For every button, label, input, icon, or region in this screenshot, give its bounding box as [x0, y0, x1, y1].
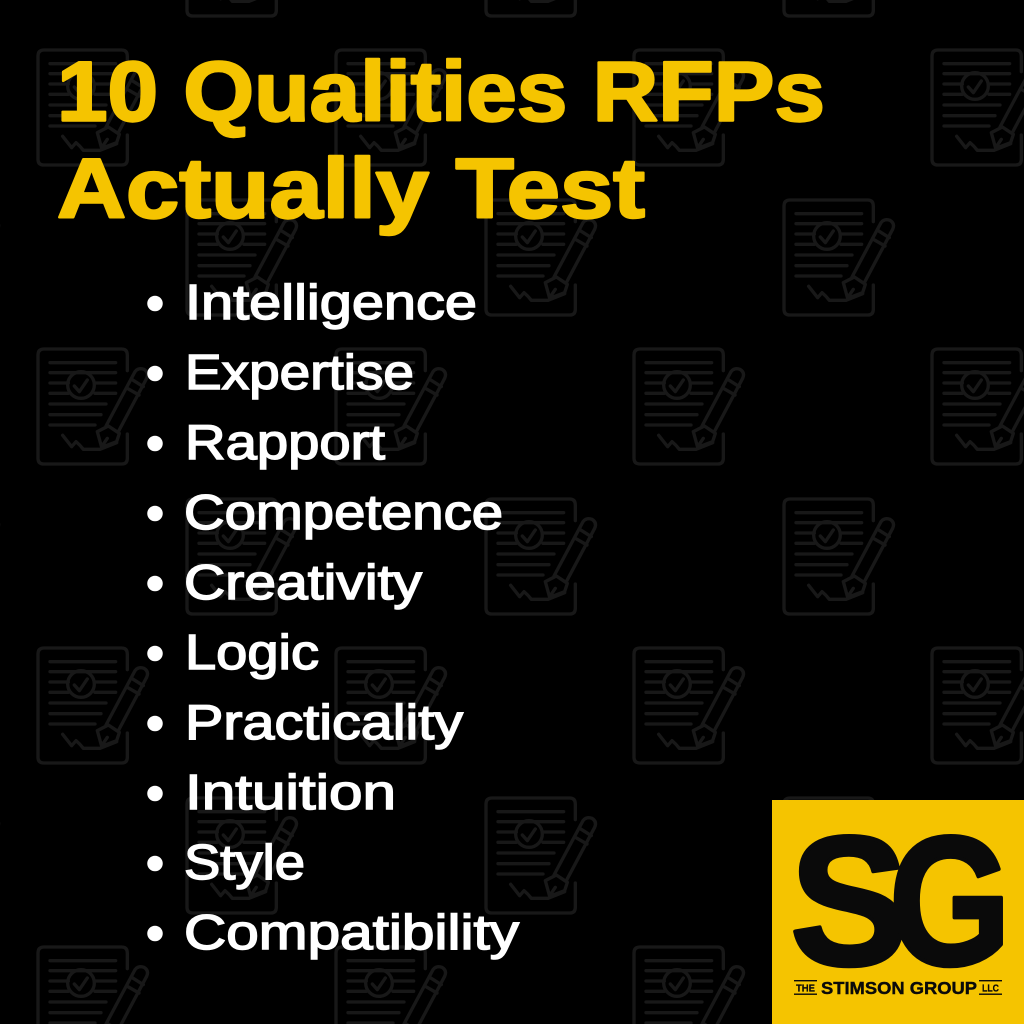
item: Logic: Logic	[185, 626, 319, 680]
item: Intuition: Intuition	[185, 766, 396, 820]
logo wordmark: THE	[796, 983, 815, 995]
item: Compatibility: Compatibility	[184, 906, 520, 960]
item: Intuition	[148, 766, 396, 820]
title: 10 Qualities RFPs	[57, 44, 825, 138]
logo wordmark: STIMSON GROUP	[821, 978, 977, 998]
bullet list of qualities	[148, 276, 520, 960]
title: Actually Test	[57, 142, 645, 236]
item: Creativity: Creativity	[184, 556, 423, 610]
title	[57, 44, 825, 236]
item: Style: Style	[184, 836, 305, 890]
item: Expertise: Expertise	[185, 346, 414, 400]
item: Rapport: Rapport	[185, 416, 385, 470]
logo monogram SG: S	[790, 798, 908, 1004]
item: Practicality: Practicality	[185, 696, 464, 750]
logo wordmark: LLC	[982, 983, 999, 995]
item: Style	[148, 836, 305, 890]
item: Logic	[148, 626, 319, 680]
item: Intelligence: Intelligence	[185, 276, 477, 330]
item: Competence: Competence	[184, 486, 503, 540]
logo monogram SG	[790, 798, 1011, 1004]
logo: The Stimson Group LLC	[772, 798, 1024, 1024]
